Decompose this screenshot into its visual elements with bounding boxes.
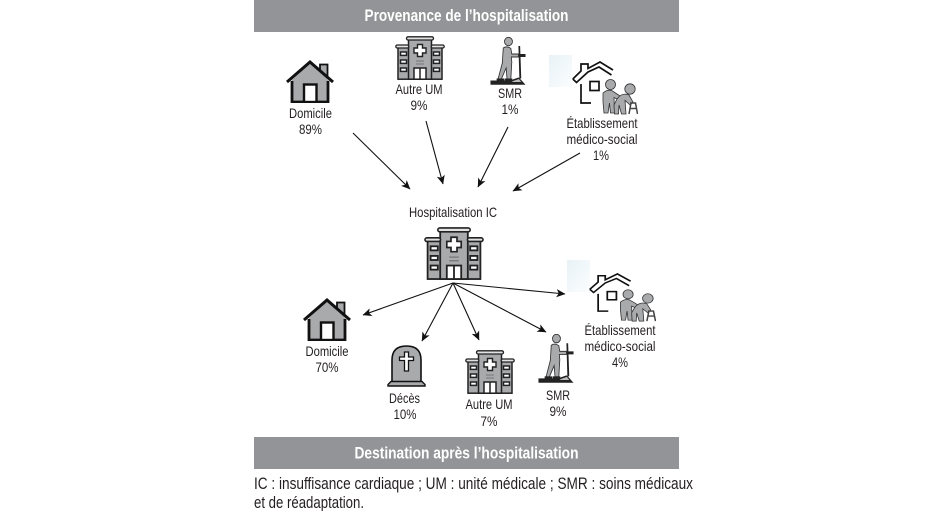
destination: Autre UM: Autre UM — [466, 396, 512, 412]
destination: Établissement médico-social: médico-social — [584, 338, 656, 354]
origin: Établissement médico-social — [549, 55, 638, 163]
destination: SMR — [538, 334, 574, 419]
destination: Établissement médico-social: 4% — [612, 354, 628, 370]
origin: SMR: 1% — [502, 101, 518, 117]
footnote: abbreviations: IC : insuffisance cardiaque ; UM : unité médicale ; SMR : soins médicaux — [254, 475, 694, 493]
origin: SMR: SMR — [498, 85, 522, 101]
destination: Autre UM — [466, 351, 514, 429]
origin: Établissement médico-social: Établissement — [566, 115, 638, 131]
destination: SMR: SMR — [546, 387, 570, 403]
destination: Domicile: 70% — [316, 359, 338, 375]
panel: origin of hospitalisation — [287, 37, 638, 163]
footnote: abbreviations — [254, 475, 694, 511]
origin: Autre UM — [396, 37, 444, 113]
origin: Autre UM: 9% — [410, 97, 428, 113]
heading: Destination après l'hospitalisation: Destination après l’hospitalisation — [354, 444, 578, 462]
origin: Établissement médico-social: médico-social — [566, 131, 638, 147]
arrows: origins to hospitalisation — [353, 121, 580, 191]
origin: Domicile — [287, 62, 333, 137]
destination: SMR: 9% — [550, 403, 566, 419]
destination: Établissement médico-social: Établissement — [584, 322, 656, 338]
heading: Provenance de l'hospitalisation — [254, 0, 679, 32]
origin: SMR — [490, 37, 526, 117]
arrows: hospitalisation to destinations — [363, 283, 565, 341]
origin: Autre UM: Autre UM — [396, 81, 442, 97]
destination: Autre UM: 7% — [480, 413, 498, 429]
origin: Établissement médico-social: 1% — [593, 147, 609, 163]
destination: Domicile — [304, 300, 350, 375]
central node: Hospitalisation IC — [409, 204, 497, 279]
destination: Décès: Décès — [389, 390, 420, 406]
destination: Décès — [388, 346, 425, 422]
destination: Domicile: Domicile — [306, 343, 349, 359]
central node: Hospitalisation IC: Hospitalisation IC — [409, 204, 497, 220]
destination: Établissement médico-social — [567, 260, 656, 370]
destination: Décès: 10% — [394, 406, 416, 422]
heading: Provenance de l'hospitalisation: Provenance de l’hospitalisation — [364, 6, 568, 25]
panel: destination after hospitalisation — [304, 260, 656, 429]
origin: Domicile: Domicile — [289, 105, 332, 121]
origin: Domicile: 89% — [299, 121, 322, 137]
heading: Destination après l'hospitalisation — [254, 437, 679, 469]
